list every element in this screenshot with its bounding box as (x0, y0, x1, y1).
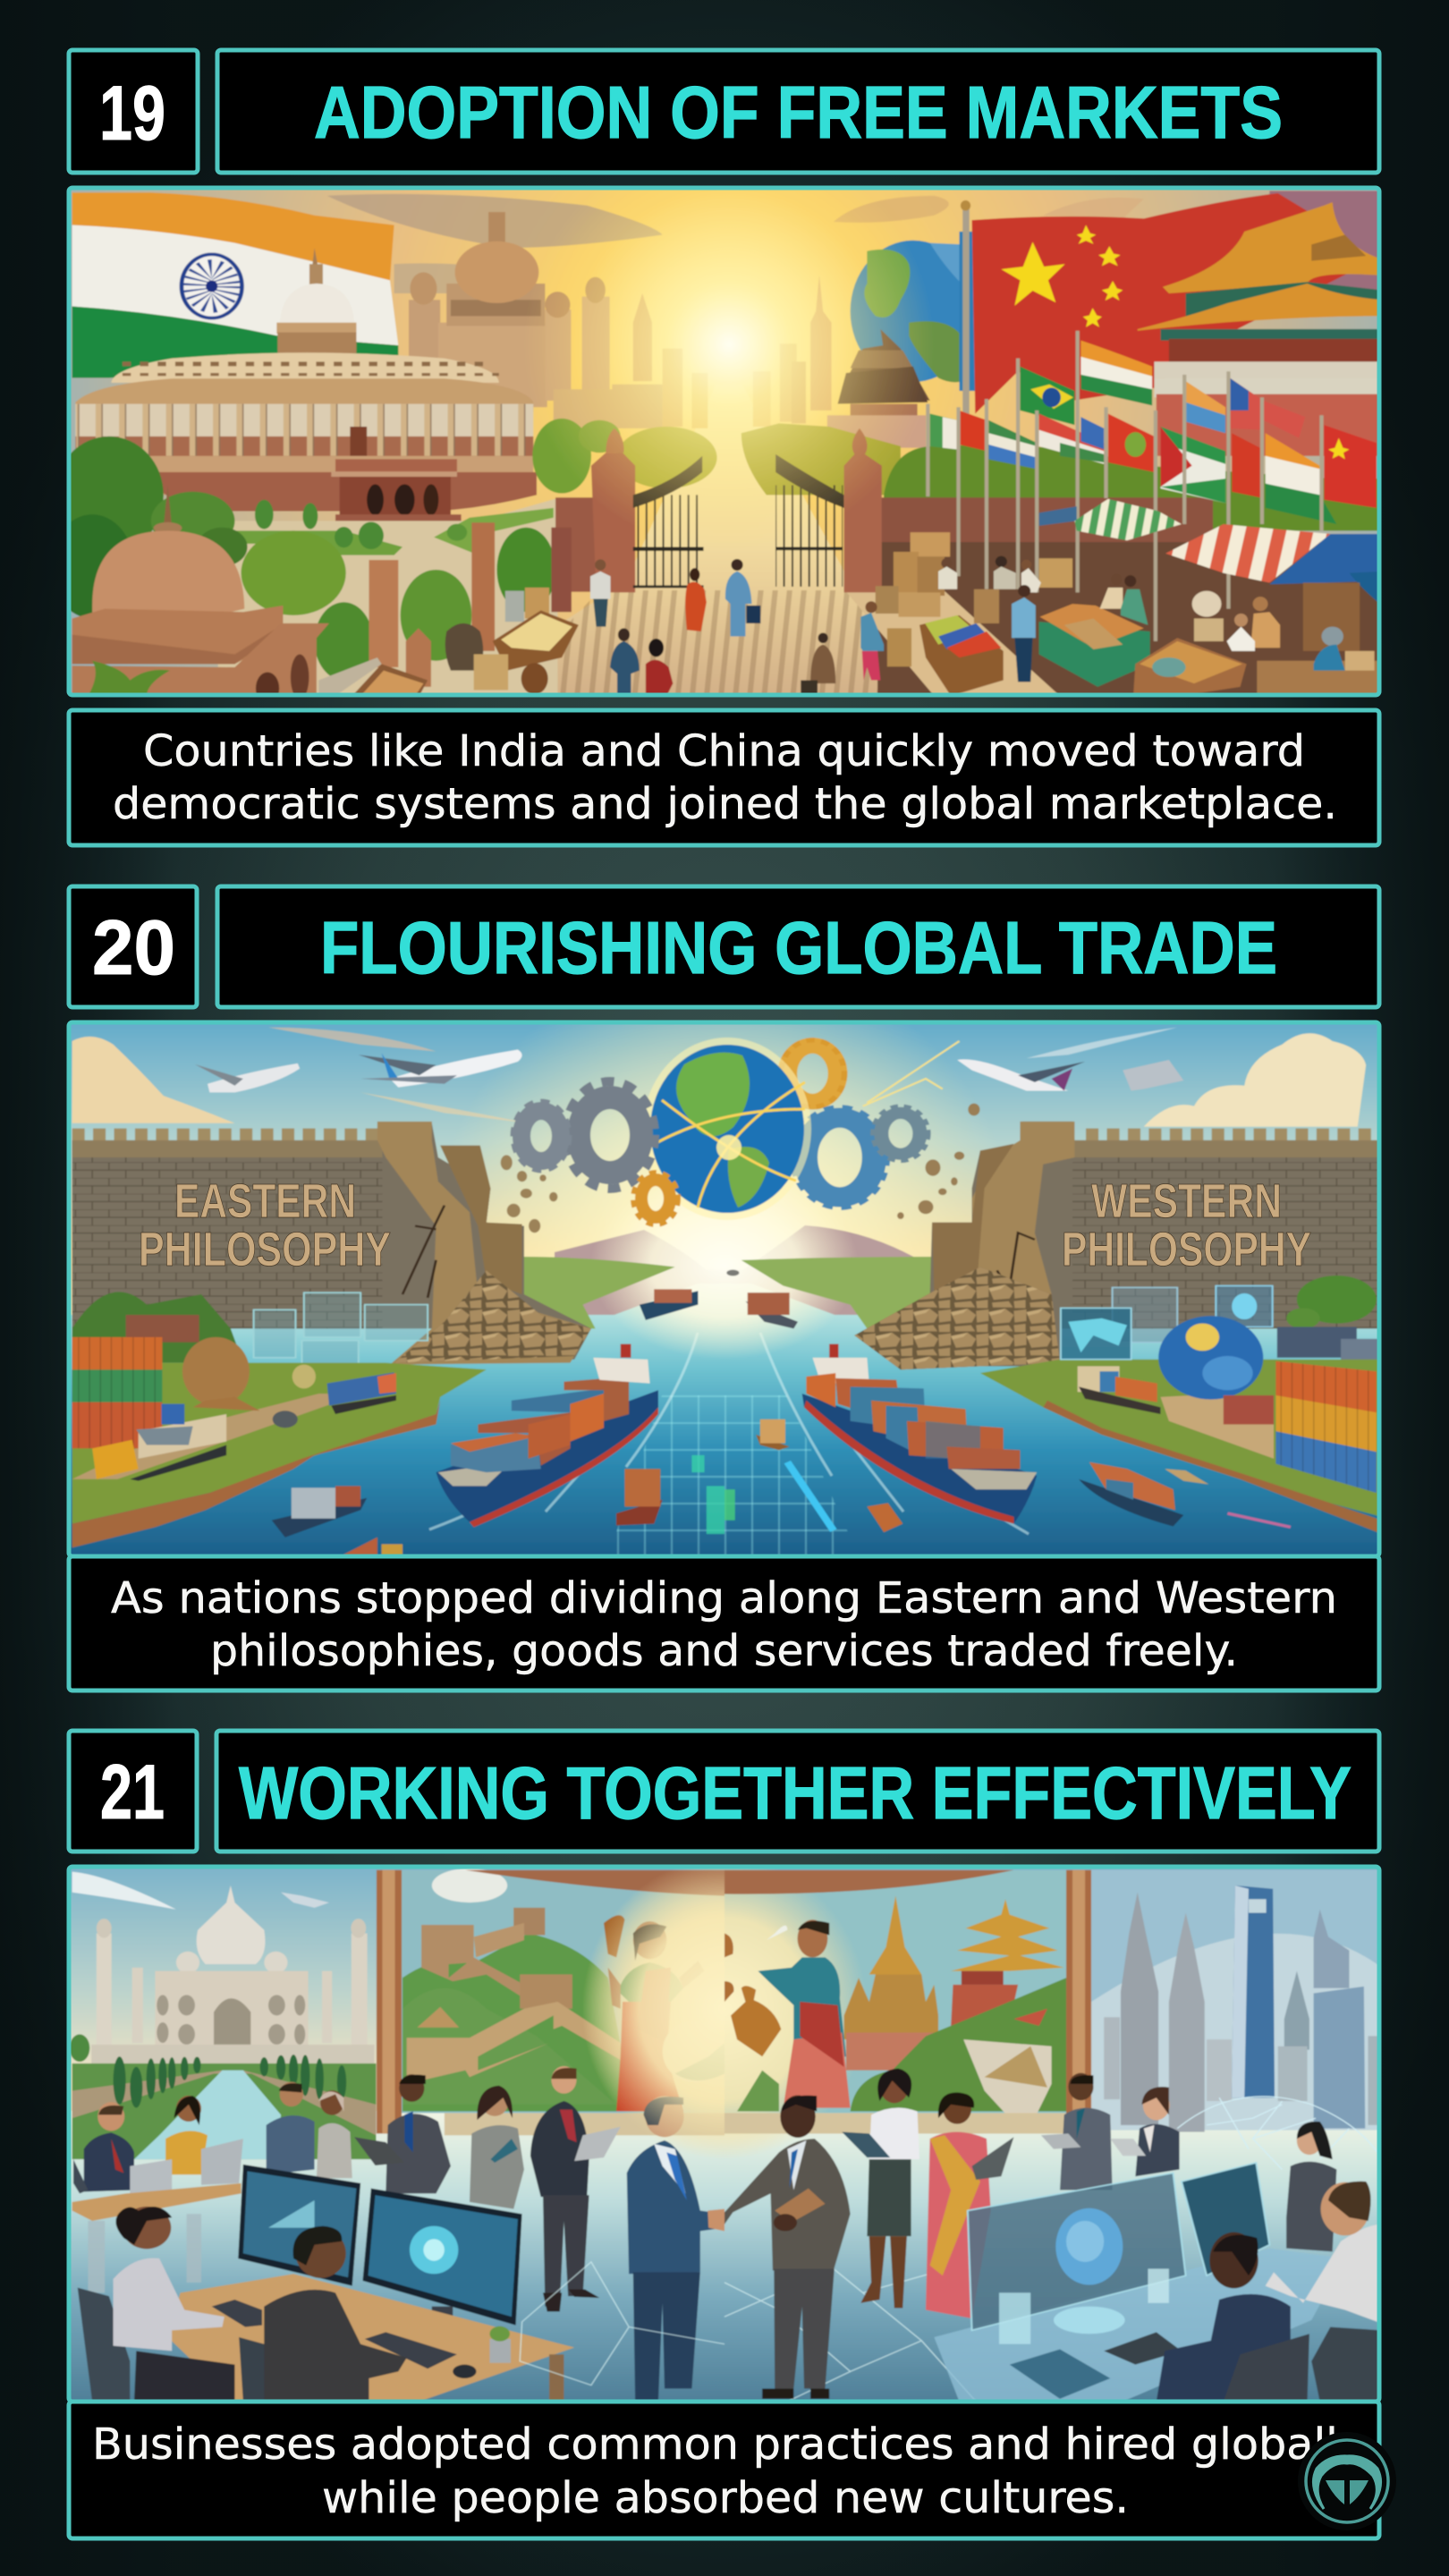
dancing man and pot (798, 1919, 827, 1957)
image frame 19 (69, 188, 1379, 695)
gate pillars and wall (369, 428, 704, 687)
caption 21: while people absorbed new cultures. (322, 2473, 1129, 2523)
wall label: Western Philosophy: PHILOSOPHY (1062, 1223, 1311, 1276)
seated workers (1104, 2182, 1382, 2402)
skyline and globe (753, 232, 985, 448)
mural with frame (377, 1858, 867, 2159)
desk monitors (238, 2165, 522, 2339)
awnings (1039, 499, 1382, 651)
heading 19 (217, 50, 1379, 173)
market wall and trees (741, 393, 1387, 696)
parliament dome (276, 248, 356, 353)
gate shadow stripes (560, 590, 878, 692)
container stacks (1224, 1361, 1377, 1493)
green hills on left bank (522, 1257, 675, 1328)
foliage and scroll (851, 1978, 1066, 2112)
foreground dome pavilion (72, 485, 329, 705)
market goods left (318, 588, 579, 696)
grounds (218, 498, 557, 696)
gears left of globe (513, 1081, 678, 1224)
clouds (1027, 1028, 1366, 1127)
western wall (854, 1122, 1382, 1369)
caption 19 (69, 710, 1379, 845)
big cargo ship left (436, 1344, 658, 1527)
caption 21: Businesses adopted common practices and hired globally (92, 2419, 1364, 2470)
wall label: Western Philosophy (1062, 1174, 1311, 1276)
handshake man left (627, 2096, 724, 2402)
heading 20 (217, 886, 1379, 1007)
trees (50, 419, 717, 681)
team standing (354, 2066, 621, 2311)
globe (643, 1038, 811, 1220)
coast and land (72, 1292, 487, 1547)
number box 19 (69, 50, 198, 173)
central glow on the river (590, 1172, 859, 1360)
heading 19: ADOPTION OF FREE MARKETS (314, 71, 1283, 154)
right half: Western wall, containers and ships (724, 1028, 1382, 1534)
section 19: adoption of free markets (50, 50, 1387, 845)
clouds (72, 1028, 529, 1123)
number box 19: 19 (99, 71, 165, 157)
big cargo ship right (802, 1344, 1037, 1523)
tumbling stones (897, 1104, 979, 1219)
Taj Mahal (91, 1885, 375, 2063)
number box 20 (69, 886, 197, 1007)
caption 21 (69, 2402, 1379, 2538)
heading 21 (216, 1731, 1379, 1852)
illustration: India and China opening gates to global markets (72, 190, 1377, 692)
number box 20: 20 (92, 905, 175, 991)
green hills on right bank (741, 1257, 934, 1328)
trucks (92, 1365, 396, 1481)
pagoda (951, 1899, 1064, 1971)
dancing woman (604, 1915, 725, 2112)
central road (558, 408, 878, 692)
heading 20: FLOURISHING GLOBAL TRADE (320, 906, 1277, 989)
image frame 20 (69, 1022, 1379, 1556)
water (67, 1225, 1382, 1556)
logo badge (1298, 2432, 1396, 2530)
shoppers and vendors (725, 556, 1345, 696)
parliament rotunda (75, 352, 537, 523)
wall label: Eastern Philosophy: EASTERN (174, 1174, 356, 1228)
pagoda (842, 329, 930, 401)
holographic workstation (934, 2163, 1345, 2402)
mural right part (582, 1858, 1091, 2159)
tumbling stones (501, 1155, 557, 1233)
wall label: Eastern Philosophy (139, 1174, 391, 1276)
crates and market stalls (876, 532, 1382, 696)
left half: Eastern wall, containers and ships (72, 1028, 724, 1557)
planes (957, 1059, 1183, 1090)
stone globe (182, 1337, 260, 1411)
holographic panels (254, 1292, 428, 1365)
section 21: working together effectively (67, 1731, 1382, 2538)
container stacks (72, 1315, 199, 1448)
caption 20: As nations stopped dividing along Eastern and Western (111, 1573, 1337, 1623)
desk group back left (72, 2082, 352, 2292)
wall label: Western Philosophy: WESTERN (1091, 1174, 1282, 1228)
distant palace (409, 212, 708, 428)
caption 19: Countries like India and China quickly moved toward (143, 726, 1305, 776)
network floor left (520, 2262, 724, 2385)
eastern wall (72, 1122, 591, 1365)
left half of scene: Indian parliament and flag (50, 192, 717, 705)
right half of scene (582, 1858, 1382, 2402)
row of flags (928, 331, 1377, 641)
illustration: walls crumbling between East and West with ships trading (67, 957, 1382, 1557)
sun glow (523, 139, 935, 550)
digital grid on the water (691, 1455, 724, 1534)
colleagues (724, 2069, 1336, 2399)
gardens and reflecting pool (70, 2034, 376, 2159)
foreground desk and workers (78, 2207, 574, 2402)
network dome (1177, 2097, 1382, 2170)
Chinese flag (961, 193, 1353, 415)
gears (781, 1040, 959, 1208)
caption 20: philosophies, goods and services traded freely. (210, 1626, 1238, 1676)
illustration: global business teamwork and cultural exchange (67, 1858, 1382, 2402)
floor network (724, 2266, 976, 2402)
image frame 21 (69, 1867, 1379, 2402)
digital grid on the water (724, 1462, 1291, 1530)
caption 19: democratic systems and joined the global marketplace. (113, 779, 1337, 829)
small boats left (272, 1289, 698, 1557)
temple (869, 1895, 921, 1974)
small boats right (726, 1270, 1208, 1532)
section 20: flourishing global trade (67, 886, 1382, 1690)
caption 20 (69, 1556, 1379, 1690)
city skyline (1091, 1870, 1382, 2131)
land and containers (980, 1275, 1382, 1534)
planes (195, 1050, 522, 1092)
wall label: Eastern Philosophy: PHILOSOPHY (139, 1223, 391, 1276)
visitors left (590, 559, 707, 696)
left half of scene (70, 1858, 867, 2402)
imperial pavilion (1138, 202, 1382, 456)
number box 21 (69, 1731, 197, 1852)
right half of scene: China, flags and market (725, 191, 1387, 696)
truck (1078, 1366, 1161, 1414)
holographic panels and data globe (1061, 1286, 1273, 1400)
number box 21: 21 (100, 1750, 165, 1835)
